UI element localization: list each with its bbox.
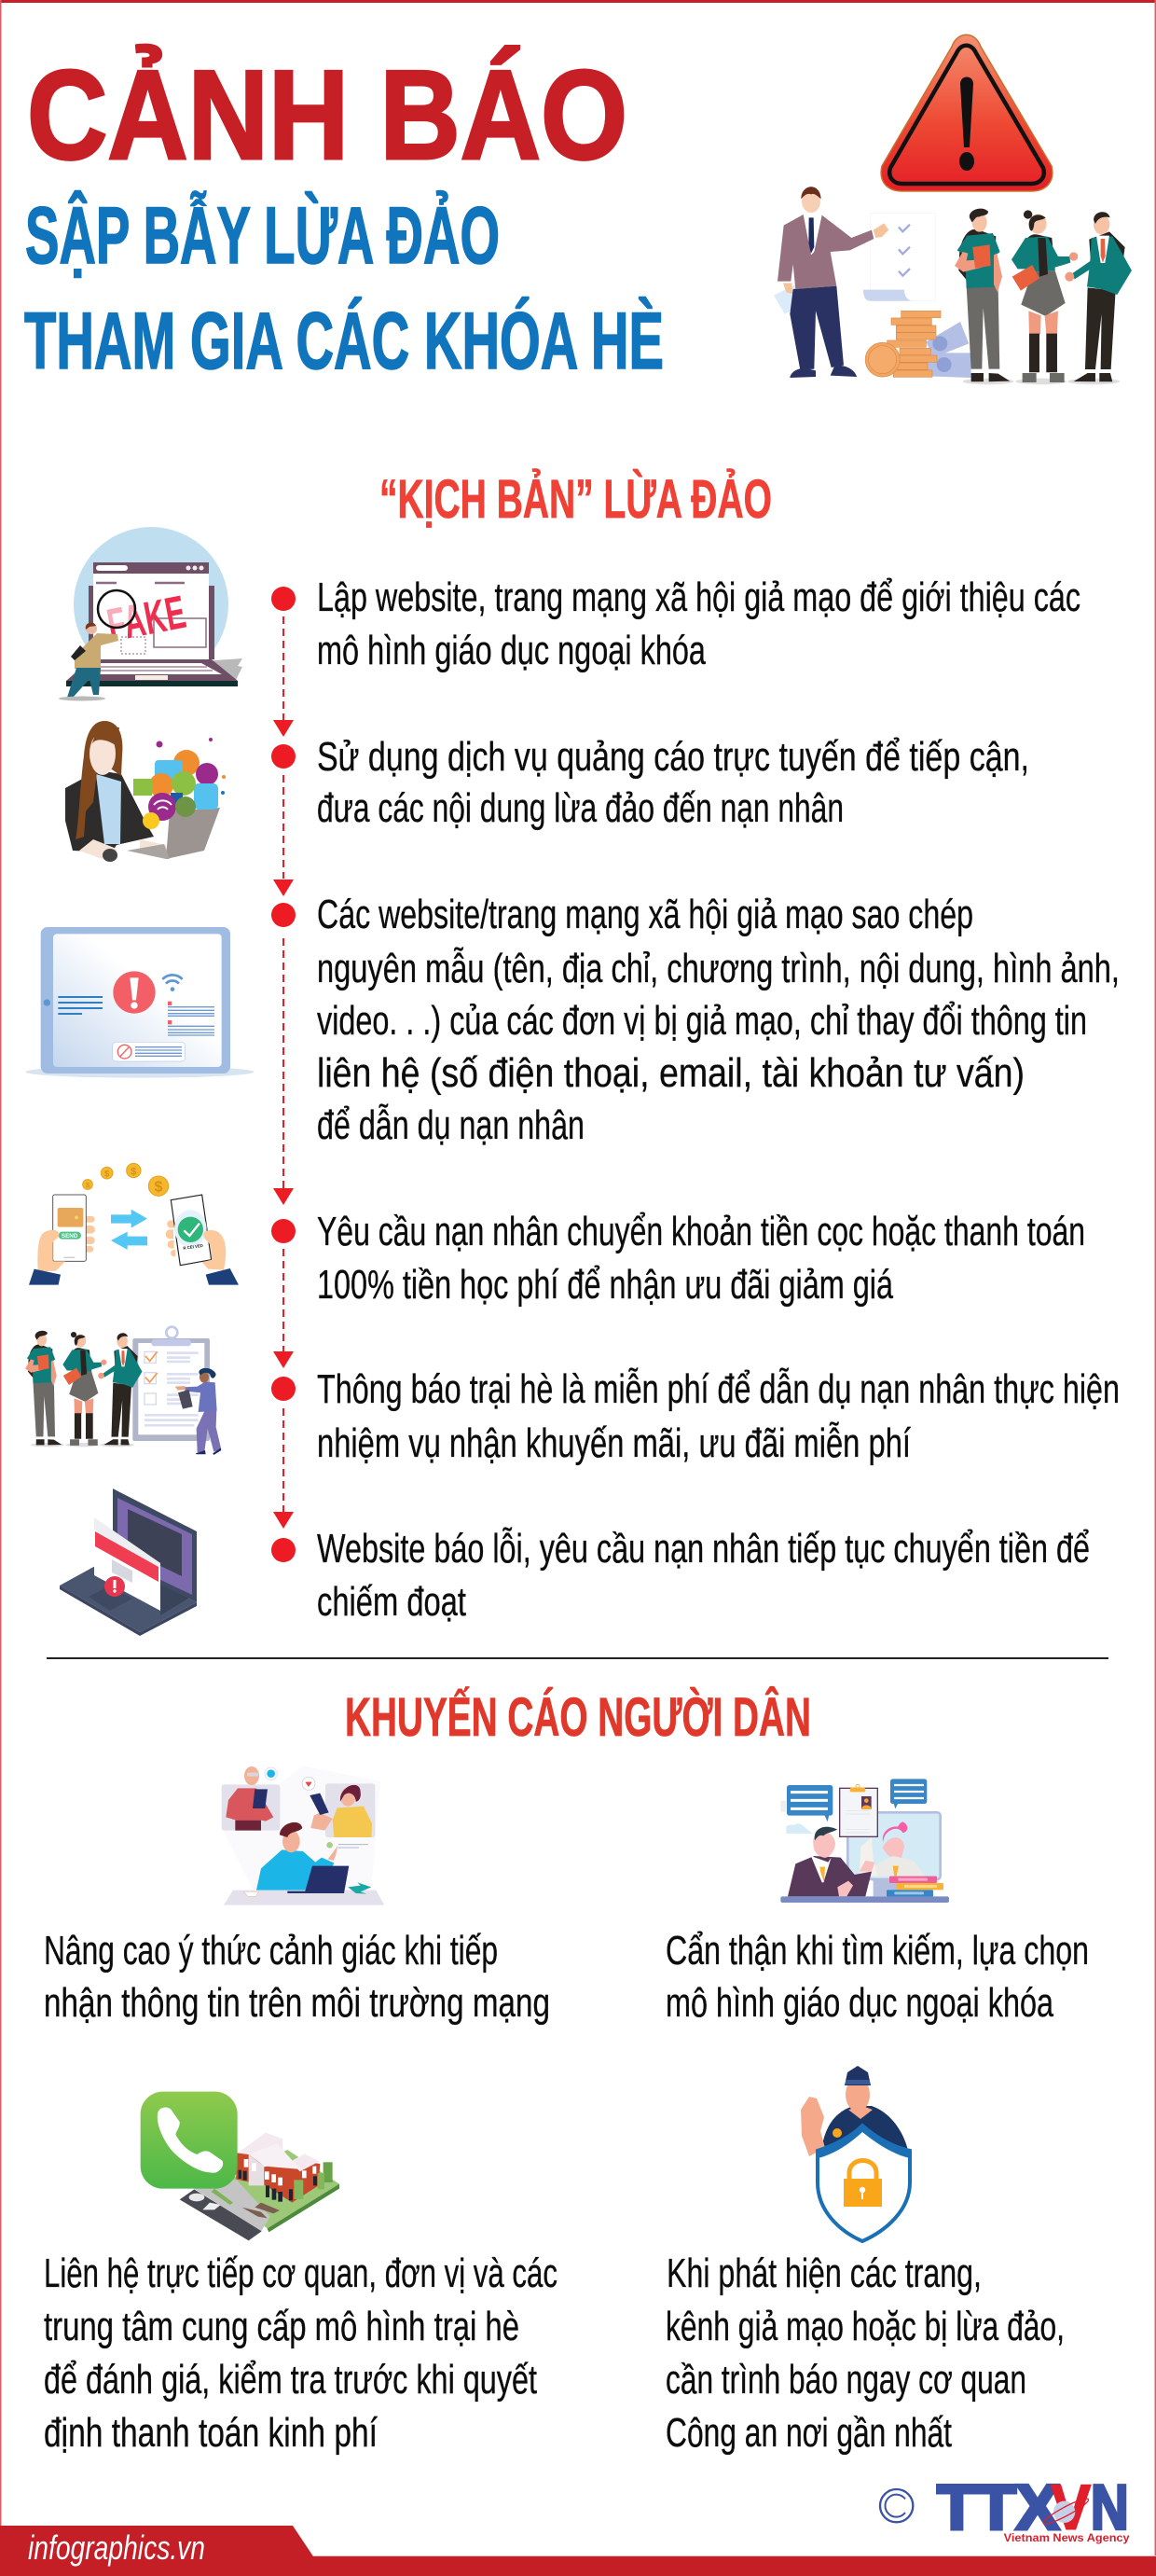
step 1 text: mô hình giáo dục ngoại khóa	[317, 628, 706, 673]
icon: tablet warning	[25, 927, 255, 1078]
icon: online video call	[222, 1766, 384, 1905]
icon: students and clipboard	[25, 1327, 221, 1455]
icon: phone money transfer: $	[104, 1169, 110, 1178]
advice 4 text: Khi phát hiện các trang,	[667, 2251, 982, 2296]
icon: phone money transfer	[29, 1163, 239, 1285]
logo: TTXVN: TTX	[937, 2472, 1059, 2543]
step 5 text	[317, 1366, 1120, 1466]
footer website text: infographics.vn	[28, 2528, 205, 2567]
icon: warning triangle	[881, 35, 1053, 191]
students	[955, 209, 1132, 384]
checklist paper	[863, 213, 935, 301]
advice 4 text: cần trình báo ngay cơ quan	[666, 2357, 1026, 2403]
step 6 text: chiếm đoạt	[317, 1579, 466, 1625]
step 3 text: liên hệ (số điện thoại, email, tài khoản tư vấn)	[317, 1050, 1025, 1096]
subtitle line 1: SẬP BẪY LỪA ĐẢO	[25, 191, 500, 281]
logo: TTXVN: N	[1091, 2472, 1129, 2543]
timeline: dots and dashed arrows	[271, 587, 296, 1562]
icon: phone and school building	[141, 2092, 339, 2240]
step 4 text	[317, 1209, 1085, 1308]
advice 1 text: nhận thông tin trên môi trường mạng	[44, 1980, 550, 2026]
icon: online consultation	[780, 1779, 949, 1903]
icon: laptop with error window	[60, 1489, 197, 1636]
teacher	[774, 187, 888, 378]
step 3 text: để dẫn dụ nạn nhân	[317, 1102, 585, 1148]
icon: phone money transfer: R CEI VED	[183, 1243, 203, 1251]
icon: police officer with shield and lock	[801, 2066, 910, 2241]
icon: phone money transfer: $	[155, 1180, 163, 1196]
icon: phone money transfer: SEND	[62, 1233, 78, 1240]
icon: woman with social media	[65, 721, 226, 862]
step 2 text	[317, 734, 1029, 831]
advice 2 text	[666, 1928, 1089, 2026]
step 3 text	[317, 892, 1120, 1148]
footer band	[0, 2526, 1156, 2576]
title: Cảnh báo: CẢNH BÁO	[27, 44, 627, 186]
logo: TTXVN	[880, 2472, 1130, 2544]
advice 3 text: trung tâm cung cấp mô hình trại hè	[44, 2304, 519, 2349]
advice 4 text: Công an nơi gần nhất	[666, 2410, 952, 2456]
students	[25, 1331, 142, 1447]
step 5 text: nhiệm vụ nhận khuyến mãi, ưu đãi miễn phí	[317, 1420, 912, 1466]
clipboard	[132, 1327, 210, 1441]
heading: kịch bản lừa đảo: “KỊCH BẢN” LỪA ĐẢO	[379, 469, 772, 530]
coins and money	[865, 311, 971, 378]
advice 1 text	[44, 1928, 550, 2026]
advice 3 text	[44, 2251, 557, 2456]
advice 1 text: Nâng cao ý thức cảnh giác khi tiếp	[44, 1928, 498, 1974]
step 6 text	[317, 1526, 1090, 1625]
advice 3 text: định thanh toán kinh phí	[44, 2410, 378, 2456]
illustration: teacher, checklist, coins and students	[774, 187, 1132, 384]
logo: TTXVN: V	[1051, 2472, 1091, 2543]
step 2 text: đưa các nội dung lừa đảo đến nạn nhân	[317, 785, 844, 831]
step 1 text	[317, 575, 1080, 673]
logo: TTXVN: Vietnam News Agency	[1004, 2531, 1130, 2544]
heading: khuyến cáo người dân: KHUYẾN CÁO NGƯỜI DÂN	[345, 1687, 811, 1748]
step 4 text: 100% tiền học phí để nhận ưu đãi giảm giá	[317, 1262, 893, 1308]
icon: fake website laptop: FAKE	[103, 586, 190, 652]
advice 3 text: Liên hệ trực tiếp cơ quan, đơn vị và các	[44, 2251, 557, 2296]
woman with tablet	[175, 1368, 221, 1455]
icon: fake website laptop	[59, 527, 242, 701]
icon: phone money transfer: $	[86, 1181, 89, 1189]
advice 4 text	[666, 2251, 1065, 2456]
subtitle line 2: THAM GIA CÁC KHÓA HÈ	[24, 297, 664, 386]
advice 3 text: để đánh giá, kiểm tra trước khi quyết	[44, 2357, 537, 2403]
icon: phone money transfer: $	[131, 1166, 137, 1177]
